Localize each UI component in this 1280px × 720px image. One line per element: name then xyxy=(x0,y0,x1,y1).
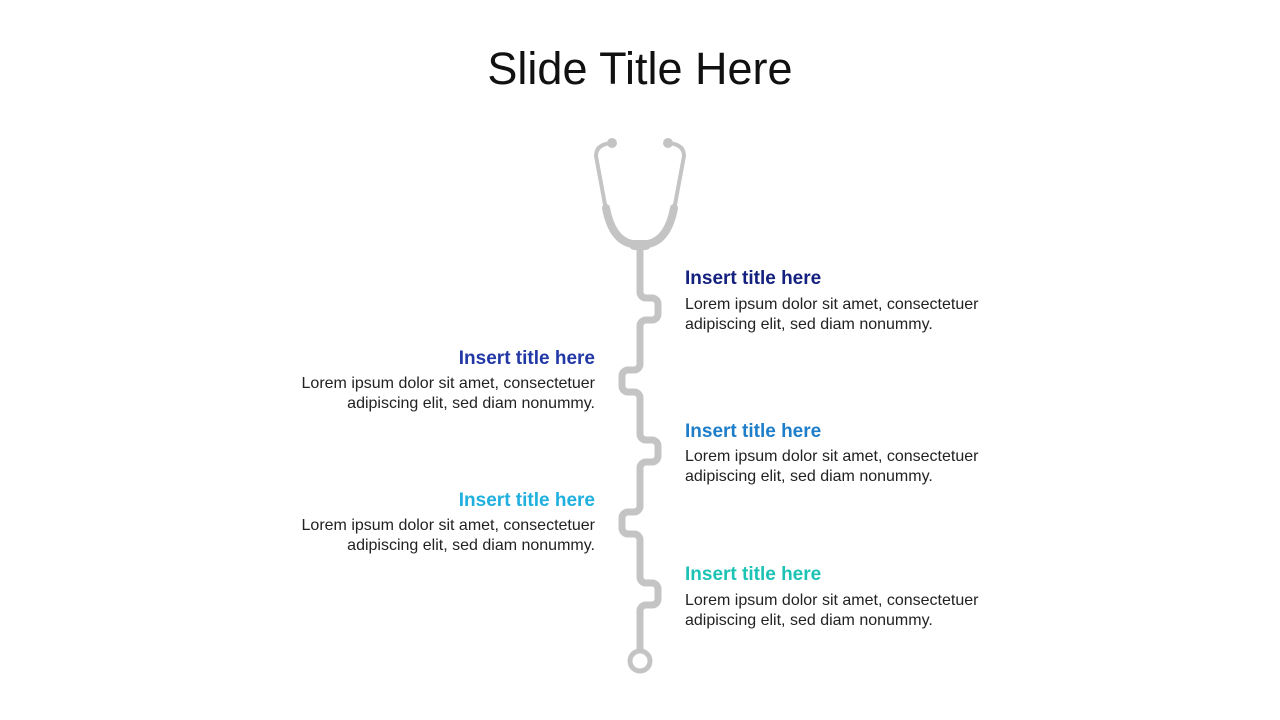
item 2: Insert title here xyxy=(459,348,595,369)
item 3: Insert title here xyxy=(685,421,821,442)
item 1: Lorem ipsum dolor sit amet, consectetuer xyxy=(685,296,978,313)
item 2 xyxy=(302,348,595,412)
item 3 xyxy=(685,421,978,484)
item 2: Lorem ipsum dolor sit amet, consectetuer xyxy=(302,375,595,392)
item 4 xyxy=(302,490,595,554)
item 3: Lorem ipsum dolor sit amet, consectetuer xyxy=(685,448,978,465)
item 5 xyxy=(685,564,978,628)
item 4: Lorem ipsum dolor sit amet, consectetuer xyxy=(302,517,595,534)
item 1: adipiscing elit, sed diam nonummy. xyxy=(685,316,933,332)
item 2: adipiscing elit, sed diam nonummy. xyxy=(347,394,595,412)
item 5: Lorem ipsum dolor sit amet, consectetuer xyxy=(685,592,978,609)
item 4: adipiscing elit, sed diam nonummy. xyxy=(347,536,595,554)
title: Slide Title Here xyxy=(487,43,793,94)
item 5: adipiscing elit, sed diam nonummy. xyxy=(685,612,933,628)
item 1: Insert title here xyxy=(685,268,821,289)
item 5: Insert title here xyxy=(685,564,821,585)
item 4: Insert title here xyxy=(459,490,595,511)
item 1 xyxy=(685,268,978,332)
item 3: adipiscing elit, sed diam nonummy. xyxy=(685,468,933,484)
